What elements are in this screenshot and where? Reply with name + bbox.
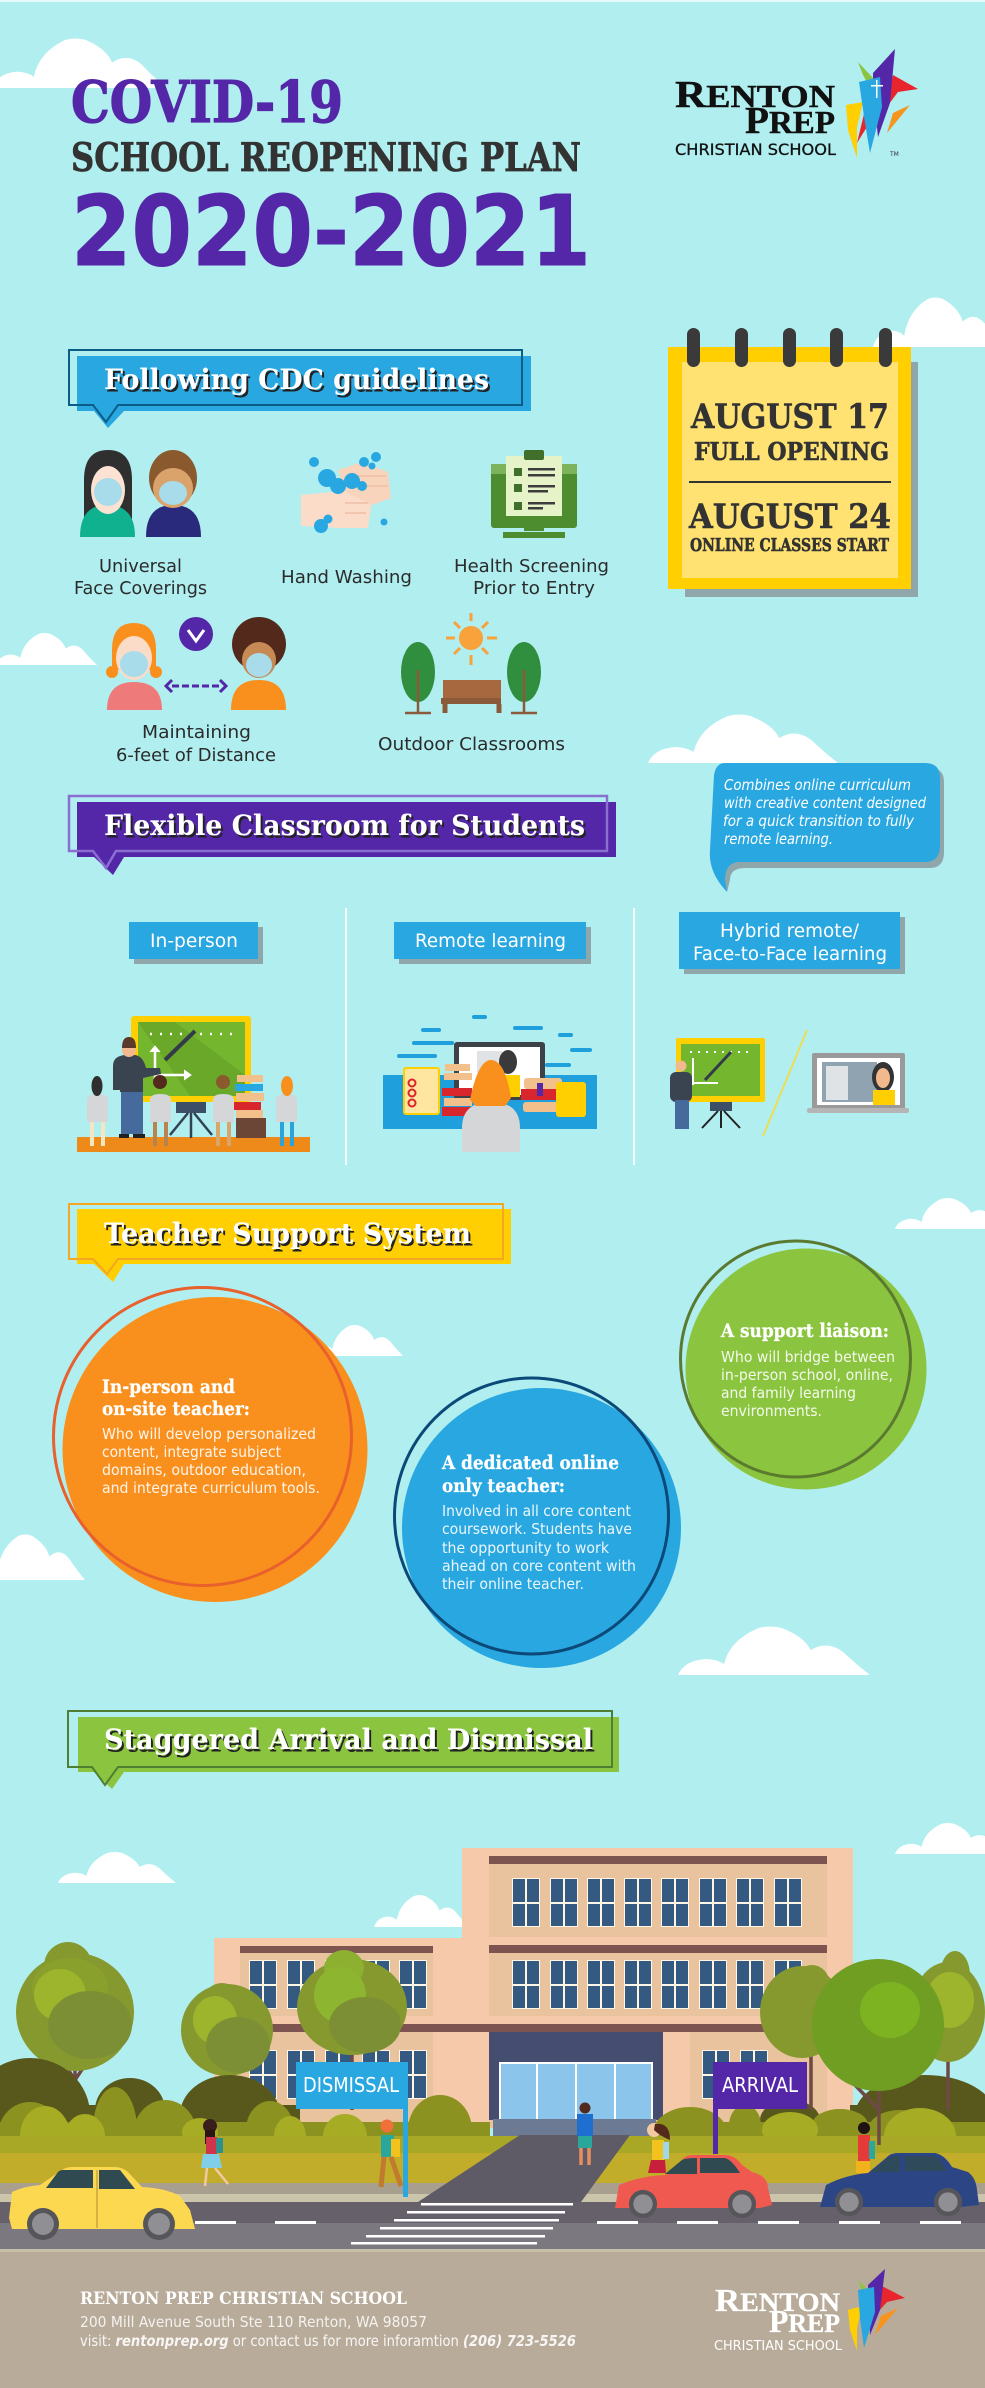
title xyxy=(71,69,591,288)
label: Hybrid remote / Face-to-Face learning: Hybrid remote/ xyxy=(720,920,860,942)
label: Universal Face Coverings xyxy=(74,556,207,599)
label: Health Screening Prior to Entry: Health Screening xyxy=(454,556,609,577)
label: Maintaining 6-feet of Distance xyxy=(116,722,276,766)
icon: health screening xyxy=(491,450,577,538)
panel: in-person teacher: on-site teacher: xyxy=(102,1398,250,1420)
footer logo: CHRISTIAN SCHOOL xyxy=(714,2339,843,2354)
icon: maintaining distance xyxy=(106,617,286,710)
footer panel xyxy=(0,2249,985,2388)
logo: Renton Prep Christian School: PREP xyxy=(745,100,835,142)
banner: Flexible Classroom for Students: Flexible Classroom for Students xyxy=(104,809,585,842)
footer panel: 200 Mill Avenue South Ste 110 Renton, WA 98057 xyxy=(80,2313,427,2331)
calendar: key dates: ONLINE CLASSES START xyxy=(690,535,889,556)
calendar: key dates: AUGUST 17 xyxy=(690,397,889,437)
panel: dedicated online teacher: their online teacher. xyxy=(442,1575,584,1593)
banner: Teacher Support System xyxy=(69,1204,511,1282)
banner: Following CDC guidelines xyxy=(69,350,531,428)
calendar: key dates xyxy=(668,328,918,597)
school building xyxy=(214,1848,853,2136)
label: In-person xyxy=(129,922,263,964)
sign: Dismissal xyxy=(296,2062,408,2197)
panel: support liaison: Who will bridge between xyxy=(721,1348,895,1366)
car: blue xyxy=(820,2153,979,2216)
footer logo: RENTON xyxy=(715,2282,840,2318)
footer panel: RENTON PREP CHRISTIAN SCHOOL xyxy=(80,2289,407,2309)
panel: in-person teacher: domains, outdoor education, xyxy=(102,1461,306,1479)
logo: Renton Prep Christian School: CHRISTIAN SCHOOL xyxy=(675,140,836,159)
label: Universal Face Coverings: Face Coverings xyxy=(74,578,207,599)
panel: dedicated online teacher xyxy=(394,1378,681,1668)
illustration: in-person classroom xyxy=(77,1016,310,1152)
calendar: key dates: FULL OPENING xyxy=(694,437,889,466)
sign: Arrival: ARRIVAL xyxy=(722,2073,799,2097)
panel: dedicated online teacher: A dedicated online xyxy=(441,1452,619,1474)
panel: support liaison: A support liaison: xyxy=(720,1320,889,1342)
title: 2020-2021 xyxy=(71,175,591,288)
panel: dedicated online teacher: ahead on core content with xyxy=(442,1557,636,1575)
illustration: hybrid learning xyxy=(670,1030,909,1136)
callout: hybrid description: with creative content designed xyxy=(724,794,926,812)
footer panel: visit: rentonprep.org or contact us for more inforamtion (206) 723-5526 xyxy=(80,2332,576,2350)
label: Remote learning: Remote learning xyxy=(415,930,566,952)
panel: dedicated online teacher: only teacher: xyxy=(442,1475,565,1497)
label: Maintaining 6-feet of Distance: Maintaining xyxy=(142,722,251,743)
panel: in-person teacher: Who will develop personalized xyxy=(102,1425,316,1443)
callout: hybrid description: for a quick transition to fully xyxy=(723,812,915,830)
label: Hybrid remote / Face-to-Face learning: Face-to-Face learning xyxy=(693,943,887,965)
footer logo xyxy=(714,2269,905,2354)
students walking xyxy=(201,2102,875,2187)
banner: Flexible Classroom for Students xyxy=(69,796,616,875)
icon: outdoor classroom xyxy=(401,613,541,713)
callout: hybrid description xyxy=(710,763,944,892)
panel: support liaison: in-person school, online, xyxy=(721,1366,893,1384)
label: Remote learning xyxy=(394,922,591,964)
footer logo: PREP xyxy=(769,2303,840,2339)
sign: Arrival xyxy=(713,2062,807,2154)
icon: universal face coverings xyxy=(80,450,201,537)
panel: in-person teacher: In-person and xyxy=(102,1376,235,1398)
icon: hand washing xyxy=(301,452,391,533)
panel: dedicated online teacher: Involved in all core content xyxy=(442,1502,631,1520)
callout: hybrid description: Combines online curriculum xyxy=(724,776,911,794)
panel: support liaison: environments. xyxy=(721,1402,822,1420)
hills and bushes xyxy=(0,2058,985,2173)
banner: Staggered Arrival and Dismissal xyxy=(68,1711,619,1789)
label: Outdoor Classrooms: Outdoor Classrooms xyxy=(378,734,565,755)
logo: Renton Prep Christian School: TM xyxy=(889,151,899,158)
callout: hybrid description: remote learning. xyxy=(724,830,833,848)
logo: Renton Prep Christian School: RENTON xyxy=(675,74,835,116)
label: Health Screening Prior to Entry xyxy=(454,556,609,599)
panel: in-person teacher xyxy=(54,1288,368,1602)
label: Universal Face Coverings: Universal xyxy=(99,556,182,577)
banner: Staggered Arrival and Dismissal: Staggered Arrival and Dismissal xyxy=(104,1723,593,1756)
label: Health Screening Prior to Entry: Prior to Entry xyxy=(473,578,595,599)
panel: support liaison xyxy=(680,1241,926,1490)
clouds xyxy=(0,39,985,1927)
tree row, back xyxy=(16,1942,407,2110)
label: Hand Washing: Hand Washing xyxy=(281,567,412,588)
title: SCHOOL REOPENING PLAN xyxy=(71,135,581,181)
panel: in-person teacher: content, integrate subject xyxy=(102,1443,281,1461)
sign: Dismissal: DISMISSAL xyxy=(303,2073,400,2097)
label: Maintaining 6-feet of Distance: 6-feet of Distance xyxy=(116,745,276,766)
panel: in-person teacher: and integrate curriculum tools. xyxy=(102,1479,320,1497)
trees, front right xyxy=(760,1951,985,2145)
banner: Following CDC guidelines: Following CDC guidelines xyxy=(104,363,489,396)
panel: dedicated online teacher: the opportunity to work xyxy=(442,1539,609,1557)
car: yellow xyxy=(9,2167,195,2240)
calendar: key dates: AUGUST 24 xyxy=(688,497,891,537)
label: Hybrid remote / Face-to-Face learning xyxy=(679,912,905,974)
panel: support liaison: and family learning xyxy=(721,1384,856,1402)
label: In-person: In-person xyxy=(150,930,238,952)
title: COVID-19 xyxy=(71,69,343,136)
lawn and road xyxy=(0,2135,985,2249)
panel: dedicated online teacher: coursework. Students have xyxy=(442,1520,632,1538)
illustration: remote learning xyxy=(383,1015,597,1152)
banner: Teacher Support System: Teacher Support System xyxy=(104,1217,471,1250)
logo: Renton Prep Christian School xyxy=(675,49,918,159)
car: red xyxy=(615,2155,772,2218)
dividers xyxy=(346,908,634,1165)
